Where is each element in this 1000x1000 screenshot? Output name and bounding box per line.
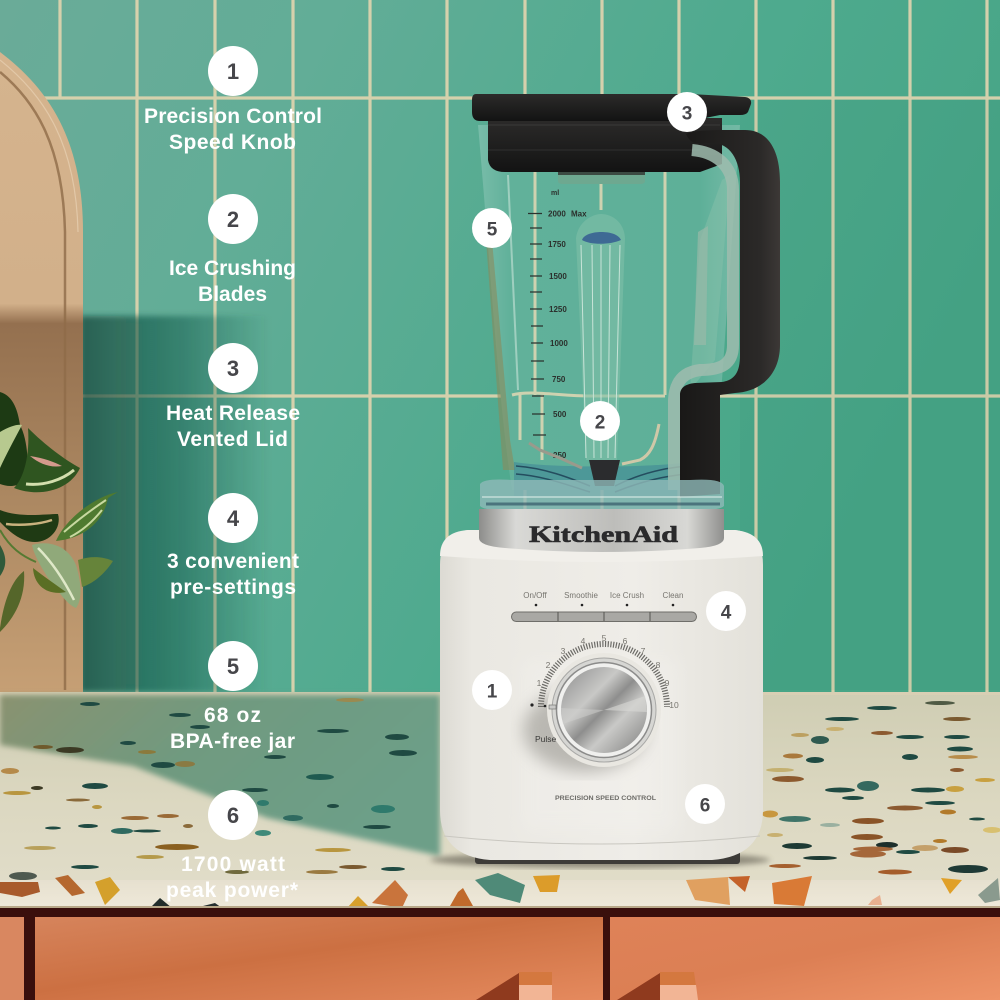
speed dial: 4 xyxy=(581,636,586,646)
on-product marker 2 xyxy=(580,401,620,441)
plant leaves xyxy=(0,392,118,632)
speed dial: Pulse xyxy=(535,734,557,744)
speed dial: 5 xyxy=(602,633,607,643)
on-product marker 3: 3 xyxy=(682,104,692,124)
blender cast shadow xyxy=(430,852,770,868)
feature 6: 1700 watt peak power: peak power* xyxy=(166,879,299,902)
silver collar with brand name: KitchenAid xyxy=(529,522,678,547)
feature 3: heat release vented lid: 3 xyxy=(227,356,239,381)
feature 5: 68 oz jar: 5 xyxy=(227,654,239,679)
feature 4: three pre-settings: 4 xyxy=(227,506,240,531)
capacity markings: 1750 xyxy=(548,240,566,249)
feature 6: 1700 watt peak power: 1700 watt xyxy=(181,853,285,876)
preset buttons xyxy=(512,591,696,622)
lid xyxy=(472,94,751,184)
feature 1: precision control speed knob: Speed Knob xyxy=(169,131,296,154)
terrazzo countertop xyxy=(0,692,1000,908)
capacity markings xyxy=(528,190,587,460)
feature 1: precision control speed knob xyxy=(144,46,322,154)
capacity markings: 2000 xyxy=(548,210,566,218)
speed dial: 10 xyxy=(669,700,679,710)
capacity markings: 500 xyxy=(553,410,567,419)
capacity markings: 1000 xyxy=(550,339,568,348)
feature 5: 68 oz jar: 68 oz xyxy=(204,704,261,727)
on-product marker 4: 4 xyxy=(721,602,732,624)
on-product marker 4 xyxy=(706,591,746,631)
speed dial: 3 xyxy=(561,646,566,656)
handle xyxy=(674,130,780,497)
speed dial xyxy=(523,633,679,772)
feature 5: 68 oz jar xyxy=(170,641,295,753)
speed dial: 6 xyxy=(623,636,628,646)
blender xyxy=(430,94,780,868)
on-product marker 3 xyxy=(667,92,707,132)
feature 3: heat release vented lid: Heat Release xyxy=(166,402,300,425)
capacity markings: 250 xyxy=(553,451,567,460)
feature 2: ice crushing blades: Ice Crushing xyxy=(169,257,296,280)
tiled wall xyxy=(0,0,1000,695)
blades xyxy=(514,424,690,496)
feature 4: three pre-settings: pre-settings xyxy=(170,576,296,599)
speed dial: 1 xyxy=(537,678,542,688)
counter front edge xyxy=(0,873,1000,908)
on-product marker 6 xyxy=(685,784,725,824)
on-product marker 2: 2 xyxy=(595,412,605,434)
feature 5: 68 oz jar: BPA-free jar xyxy=(170,730,295,753)
feature 1: precision control speed knob: Precision Control xyxy=(144,105,322,128)
capacity markings: ml xyxy=(551,190,559,197)
feature 6: 1700 watt peak power: 6 xyxy=(227,803,239,828)
capacity markings: 750 xyxy=(552,375,566,384)
preset buttons: Ice Crush xyxy=(610,591,644,600)
speed dial: 7 xyxy=(641,646,646,656)
on-product marker 1 xyxy=(472,670,512,710)
on-product marker 5: 5 xyxy=(487,220,498,240)
cabinet handles xyxy=(476,972,698,1000)
on-product marker 6: 6 xyxy=(700,796,710,816)
preset buttons: Smoothie xyxy=(564,591,598,600)
speed dial: 2 xyxy=(546,660,551,670)
motor base xyxy=(440,530,763,864)
capacity markings: 1500 xyxy=(549,272,567,281)
feature 6: 1700 watt peak power xyxy=(166,790,299,902)
feature 2: ice crushing blades xyxy=(169,194,296,306)
cutting board xyxy=(0,52,83,714)
on-product marker 5 xyxy=(472,208,512,248)
feature 2: ice crushing blades: Blades xyxy=(198,283,267,306)
feature 4: three pre-settings xyxy=(167,493,299,599)
capacity markings: Max xyxy=(571,210,587,218)
on-product marker 1: 1 xyxy=(487,682,498,702)
speed dial: 9 xyxy=(665,678,670,688)
feature 1: precision control speed knob: 1 xyxy=(227,59,239,84)
preset buttons: Clean xyxy=(663,591,683,600)
central column xyxy=(576,214,625,460)
feature 3: heat release vented lid xyxy=(166,343,300,451)
cabinet doors xyxy=(0,908,1000,1000)
precision speed control label: PRECISION SPEED CONTROL xyxy=(555,795,656,802)
jar base ring xyxy=(480,480,724,510)
silver collar with brand name xyxy=(479,509,724,552)
speed dial: 8 xyxy=(656,660,661,670)
jar left wall highlights xyxy=(486,240,515,470)
jar xyxy=(478,125,740,496)
feature 4: three pre-settings: 3 convenient xyxy=(167,550,299,573)
capacity markings: 1250 xyxy=(549,305,567,314)
feature 3: heat release vented lid: Vented Lid xyxy=(177,428,288,451)
preset buttons: On/Off xyxy=(523,591,547,600)
feature 2: ice crushing blades: 2 xyxy=(227,207,239,232)
counter top surface chips xyxy=(1,698,1000,880)
